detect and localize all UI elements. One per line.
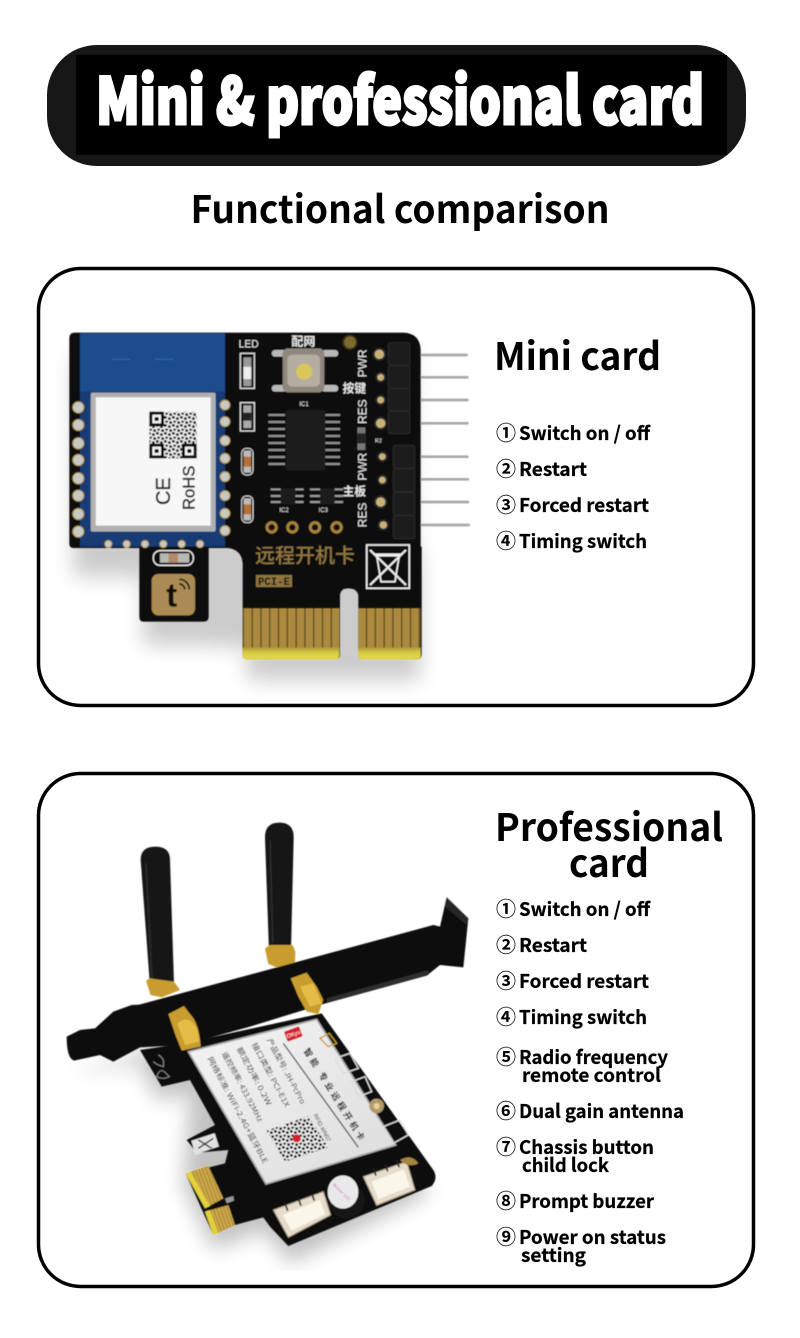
antenna near	[141, 847, 180, 997]
brand tag	[284, 1026, 303, 1042]
small ICs: IC2	[279, 508, 289, 514]
professional card feature list	[496, 893, 684, 1268]
feature 3: Forced restart	[519, 491, 649, 518]
professional card photo	[67, 823, 468, 1263]
feature 4: Timing switch	[519, 1003, 647, 1030]
feature 6: Dual gain antenna	[519, 1097, 684, 1124]
feature 4: ④	[496, 525, 516, 554]
silkscreen labels: R2	[375, 439, 382, 445]
CE mark: CE	[153, 477, 175, 505]
C3 capacitor	[153, 551, 193, 565]
feature 3: ③	[496, 489, 516, 518]
module shield	[91, 393, 216, 532]
feature 2: ②	[496, 453, 516, 482]
tuya logo: t	[166, 578, 177, 615]
mini card board photo	[69, 333, 469, 680]
gold connectors	[168, 973, 323, 1051]
feature 3: ③	[496, 965, 516, 994]
feature 9: setting	[521, 1241, 587, 1268]
silkscreen labels: 按键	[343, 382, 366, 396]
bracket fold highlight	[445, 897, 468, 925]
recycling tab	[191, 1133, 219, 1154]
right edge icons	[320, 1033, 408, 1143]
silkscreen labels: 主板	[343, 485, 366, 499]
board shadow	[73, 353, 420, 680]
silkscreen labels: RES	[356, 503, 370, 527]
gold leaf mark	[400, 1157, 418, 1165]
gold fingers	[243, 608, 421, 659]
capacitors	[242, 448, 253, 523]
feature 3: Forced restart	[519, 967, 649, 994]
buzzer: Buzzer 12V	[332, 1182, 351, 1202]
feature 1: ①	[496, 893, 516, 922]
silkscreen product name: 远程开机卡	[255, 540, 355, 569]
white shield sticker	[188, 1019, 396, 1184]
sticker spec lines: 产品型号: JH-PcPro	[264, 1036, 308, 1107]
feature 7: Chassis button	[519, 1133, 654, 1160]
blue wifi module	[80, 333, 225, 547]
feature 2	[496, 453, 587, 482]
tuya logo	[152, 574, 195, 615]
connector left	[273, 1192, 331, 1237]
silkscreen labels: PWR	[356, 452, 370, 481]
feature 5: ⑤	[496, 1041, 516, 1070]
sticker spec lines: 网络标准: WiFi-2.4G+蓝牙BLE	[205, 1055, 271, 1166]
bracket	[67, 897, 468, 1062]
QR code	[149, 412, 197, 458]
tact button	[275, 348, 335, 392]
feature 4: ④	[496, 1001, 516, 1030]
feature 4: Timing switch	[519, 527, 647, 554]
LED component	[240, 353, 254, 388]
feature 1: Switch on / off	[519, 895, 651, 922]
feature 2	[496, 929, 587, 958]
connector right	[363, 1160, 415, 1205]
small ICs: IC3	[319, 508, 329, 514]
gold via	[343, 336, 357, 349]
resistor R1	[240, 403, 254, 431]
professional card heading: Professional	[495, 797, 723, 852]
PCB outline	[69, 333, 422, 659]
feature 7: ⑦	[496, 1131, 516, 1160]
small ICs	[271, 488, 343, 514]
edge button	[369, 1099, 384, 1113]
silkscreen labels: RES	[356, 399, 370, 424]
silkscreen labels: PWR	[356, 349, 370, 377]
silkscreen labels	[343, 349, 382, 527]
main IC: IC1	[299, 402, 309, 408]
sticker spec lines: 额定功率: 0.2W	[234, 1045, 275, 1108]
sticker spec lines: 遥控频率: 433.92MHz	[219, 1050, 266, 1124]
main IC	[268, 402, 340, 471]
feature 9: ⑨	[496, 1221, 516, 1250]
feature 2: Restart	[519, 455, 587, 482]
solder pads	[374, 349, 388, 530]
sticker spec lines	[205, 1036, 308, 1166]
gold fingers	[186, 1166, 235, 1235]
feature 5	[496, 1041, 668, 1088]
feature 2: ②	[496, 929, 516, 958]
feature 8: Prompt buzzer	[519, 1187, 655, 1214]
sticker heading: 智能 专业远程开机卡	[301, 1046, 368, 1143]
castellated pads	[73, 400, 230, 548]
bracket slot	[327, 970, 428, 1003]
sticker rule	[283, 1043, 358, 1147]
title banner	[47, 45, 746, 166]
feature 5: remote control	[522, 1061, 661, 1088]
bracket tab marks	[153, 1055, 169, 1078]
feature 9: Power on status	[519, 1223, 666, 1250]
RoHS mark: RoHS	[179, 466, 198, 510]
pin headers	[388, 343, 415, 539]
subtitle: Functional comparison	[190, 179, 610, 234]
feature 2: Restart	[519, 931, 587, 958]
feature 6: ⑥	[496, 1095, 516, 1124]
silkscreen LED: LED	[239, 338, 259, 350]
PCI-E tag: PCI-E	[258, 577, 290, 589]
small label: RFID WN07	[312, 1113, 331, 1143]
feature 9	[496, 1221, 666, 1268]
through holes	[267, 523, 341, 532]
feature 1: Switch on / off	[519, 419, 651, 446]
professional card heading: card	[569, 833, 649, 888]
feature 8: ⑧	[496, 1185, 516, 1214]
panel: mini card	[38, 268, 754, 706]
sticker QR code	[267, 1116, 328, 1162]
feature 7	[496, 1131, 654, 1178]
antenna far	[265, 823, 295, 967]
buzzer	[328, 1175, 365, 1219]
feature 7: child lock	[522, 1151, 609, 1178]
mini card heading: Mini card	[494, 326, 661, 381]
mini card feature list	[496, 417, 651, 554]
PCB	[140, 1013, 435, 1246]
sticker spec lines: 接口类型: PCI-E1X	[249, 1041, 293, 1110]
header pins	[407, 355, 469, 525]
feature 5: Radio frequency	[519, 1043, 668, 1070]
panel: professional card	[38, 774, 754, 1286]
recycle symbol	[367, 545, 409, 588]
shadow	[70, 1043, 430, 1263]
silkscreen 配网: 配网	[291, 334, 315, 348]
R2 resistor	[357, 427, 365, 450]
brand tag: OKyu	[286, 1030, 301, 1040]
feature 1: ①	[496, 417, 516, 446]
professional card heading	[495, 797, 723, 888]
